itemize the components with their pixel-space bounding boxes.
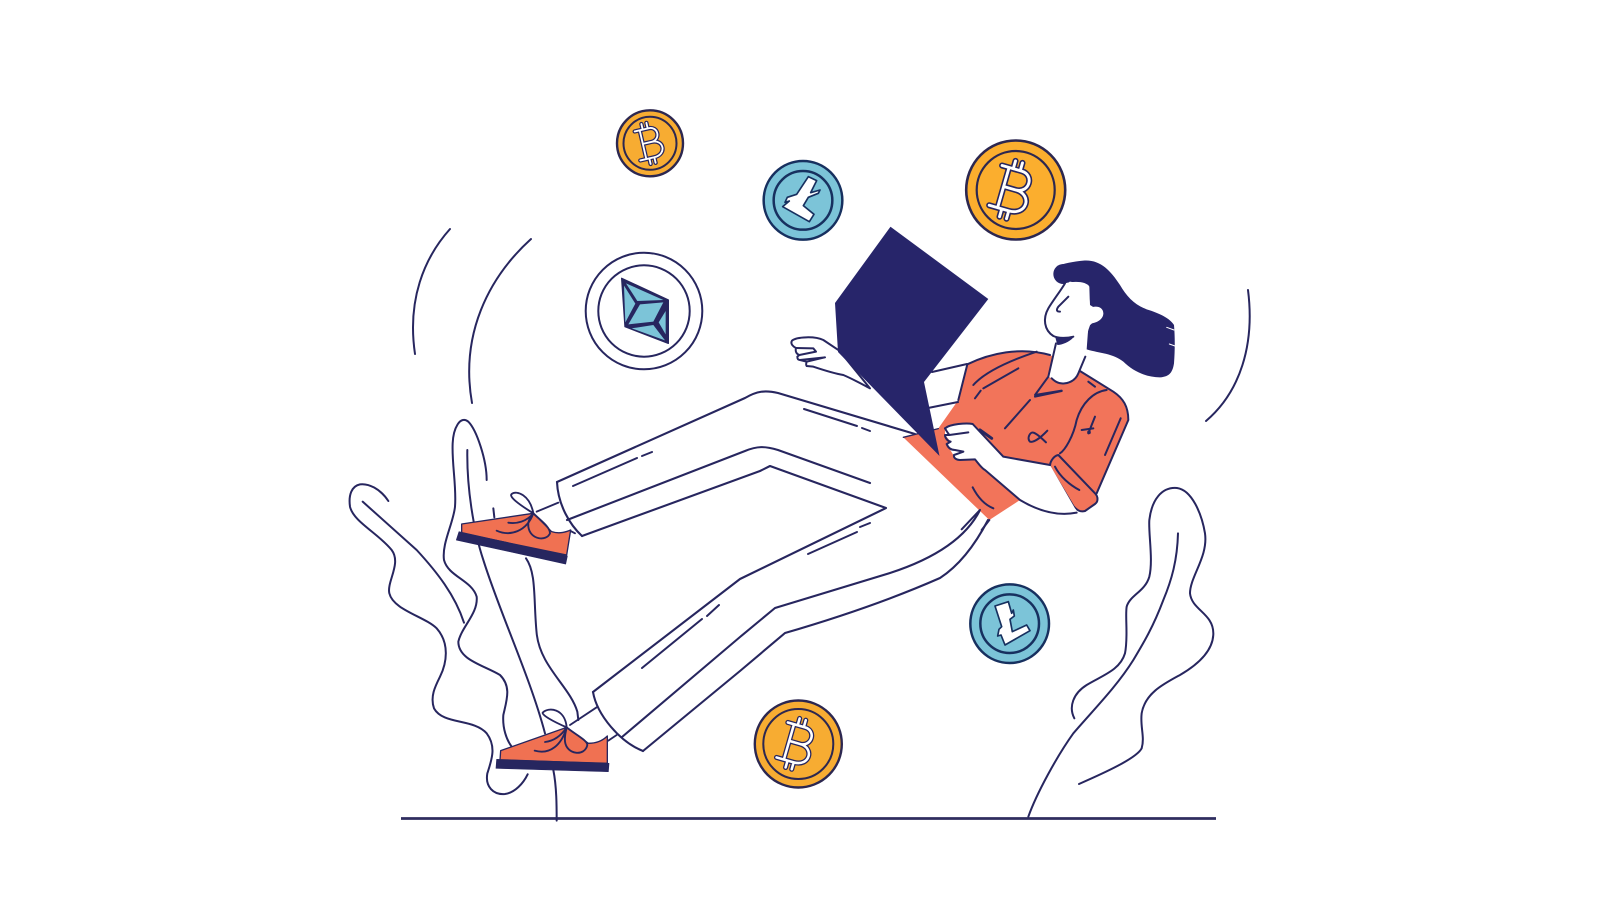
shirt folds and seams — [903, 351, 1128, 530]
neck and face — [1045, 282, 1103, 383]
hair — [1053, 261, 1175, 377]
left arm and hand — [791, 337, 870, 388]
coin: bottom bitcoin — [755, 700, 842, 788]
coin: litecoin top — [764, 161, 842, 240]
coin: litecoin bottom — [970, 584, 1049, 663]
trouser crease dashes — [573, 409, 870, 668]
person — [456, 227, 1175, 772]
ground line — [401, 817, 1216, 820]
coin: small bitcoin — [617, 110, 683, 176]
trousers — [557, 391, 988, 751]
head and hair — [1035, 261, 1175, 395]
mouth shadow — [1055, 337, 1073, 345]
motion arc: right — [1206, 290, 1250, 421]
motion arc: left outer — [413, 229, 450, 354]
shirt and right arm — [903, 351, 1128, 530]
shirt cuff — [1050, 455, 1097, 511]
coin: large bitcoin — [966, 140, 1065, 240]
neck outline and nose mark — [1035, 297, 1085, 395]
forearm and hand — [945, 424, 1077, 515]
upper shoe with sock and laces — [456, 493, 575, 564]
plant: left leaves — [350, 420, 578, 821]
coin: ethereum — [586, 253, 702, 369]
laptop — [835, 227, 988, 456]
lower shoe with sock and laces — [496, 707, 617, 772]
plant: right leaf — [1028, 488, 1213, 817]
upper arm lines — [928, 364, 967, 408]
shirt — [903, 351, 1128, 520]
motion arc: left inner — [469, 239, 531, 403]
forearm and hand outline — [945, 424, 1077, 514]
